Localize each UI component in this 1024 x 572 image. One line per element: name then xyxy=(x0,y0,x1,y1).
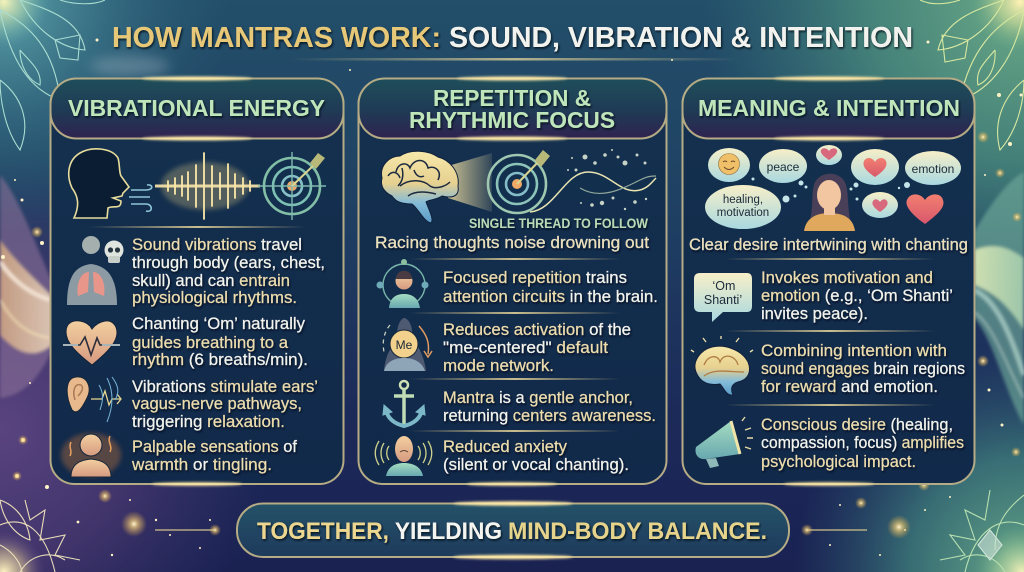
icon: thought clouds: motivation xyxy=(717,207,769,219)
text: mantra anchor: returning centers awareness. xyxy=(443,407,656,425)
left flowing wave xyxy=(0,175,52,398)
text: combining intention: sound engages brain regions xyxy=(761,360,965,378)
icon: thought clouds: peace xyxy=(767,160,800,174)
text: palpable sensations: Palpable sensations of xyxy=(132,438,297,456)
icon: target and arrow xyxy=(488,150,550,213)
icon: om shanti speech bubble xyxy=(694,273,752,322)
text: vibrations stimulate: vagus-nerve pathways, xyxy=(132,395,302,413)
icon: ear and nerve signals xyxy=(67,377,121,422)
title xyxy=(112,22,913,54)
title: SOUND, VIBRATION & INTENTION xyxy=(449,22,913,54)
text: mantra anchor: Mantra is a gentle anchor, xyxy=(443,389,633,407)
text: vibrations stimulate: Vibrations stimulate ears’ xyxy=(132,378,318,396)
glowing sparks xyxy=(12,131,1022,539)
icon: body with lungs and skull xyxy=(67,236,124,305)
text: focused repetition xyxy=(443,269,658,306)
banner: together yielding mind-body balance: TOGETHER, YIELDING xyxy=(257,518,502,545)
text: combining intention: Combining intention with xyxy=(761,342,947,360)
icon: anchor xyxy=(383,381,425,426)
icon: target and arrow xyxy=(258,152,326,220)
text: reduced anxiety: (silent or vocal chanting). xyxy=(443,456,629,474)
text: focused repetition: Focused repetition trains xyxy=(443,269,627,287)
panel: vibrational energy xyxy=(50,76,344,486)
panel header: VIBRATIONAL ENERGY xyxy=(68,95,325,121)
banner: together yielding mind-body balance xyxy=(155,501,867,559)
icon: sound wave xyxy=(155,153,260,219)
text: focused repetition: attention circuits in the brain. xyxy=(443,288,658,306)
icon: speaking head xyxy=(69,149,152,218)
text: vibrations stimulate xyxy=(132,378,318,431)
text: sound vibrations: physiological rhythms. xyxy=(132,289,297,307)
text: invokes motivation: emotion (e.g., ‘Om Shanti’ xyxy=(761,287,953,305)
text: chanting om xyxy=(132,315,308,369)
text: reduces activation: mode network. xyxy=(443,357,554,375)
text: conscious desire: compassion, focus) amplifies xyxy=(761,434,964,452)
banner: together yielding mind-body balance: MIND-BODY BALANCE. xyxy=(508,518,767,545)
icon: megaphone xyxy=(695,417,753,468)
icon: thought clouds: emotion xyxy=(912,162,954,176)
text: conscious desire: Conscious desire (healing, xyxy=(761,416,953,434)
text: sound vibrations xyxy=(132,236,325,307)
text: conscious desire xyxy=(761,416,964,471)
icon: om shanti speech bubble: Shanti’ xyxy=(704,293,742,307)
text: reduces activation xyxy=(443,321,631,375)
text: combining intention: for reward and emotion. xyxy=(761,378,938,396)
text: chanting om: rhythm (6 breaths/min). xyxy=(132,351,308,369)
text: reduces activation: Reduces activation of the xyxy=(443,321,631,339)
panel header: REPETITION & xyxy=(433,85,591,111)
icon: warm person xyxy=(61,433,121,477)
text: sound vibrations: through body (ears, chest, xyxy=(132,254,325,272)
panel header xyxy=(358,76,666,140)
text: sound vibrations: Sound vibrations travel xyxy=(132,236,302,254)
icon: om shanti speech bubble: ‘Om xyxy=(713,279,735,293)
text: reduces activation: "me-centered" default xyxy=(443,339,608,357)
icon: woman with long hair xyxy=(804,174,855,231)
right flowing wave xyxy=(974,172,1024,425)
icon: glowing brain xyxy=(691,336,753,395)
text: palpable sensations: warmth or tingling. xyxy=(131,456,272,474)
text: mantra anchor xyxy=(443,389,656,425)
text: combining intention xyxy=(761,342,965,396)
text: vibrations stimulate: triggering relaxation. xyxy=(132,413,285,431)
icon: thought clouds xyxy=(705,145,961,229)
icon: attention circle person xyxy=(376,259,428,308)
icon: heart with pulse xyxy=(63,321,120,365)
icon: large heart xyxy=(906,194,943,224)
icon: single thread wave and dots xyxy=(530,149,656,212)
text: invokes motivation: Invokes motivation and xyxy=(761,269,933,287)
icon: me-centred head: Me xyxy=(396,338,413,352)
icon: brain with focus beam xyxy=(381,151,492,223)
title: HOW MANTRAS WORK: xyxy=(112,22,441,54)
icon: thought clouds: healing, xyxy=(723,194,763,206)
text: sound vibrations: skull) and can entrain xyxy=(132,272,290,290)
icon: me-centred head xyxy=(383,318,432,371)
text: invokes motivation xyxy=(761,269,953,323)
text: conscious desire: psychological impact. xyxy=(761,453,916,471)
text: chanting om: Chanting ‘Om’ naturally xyxy=(132,315,306,333)
panel header xyxy=(50,76,344,140)
panel: meaning and intention xyxy=(682,76,974,486)
caption: clear desire: Clear desire intertwining with chanting xyxy=(689,236,968,254)
panel: repetition and rhythmic focus xyxy=(358,76,666,486)
panel header xyxy=(682,76,974,140)
panel header: MEANING & INTENTION xyxy=(698,95,960,121)
caption: racing thoughts: Racing thoughts noise drowning out xyxy=(375,234,649,252)
panel header: RHYTHMIC FOCUS xyxy=(409,107,615,133)
icon: calm person with sound waves xyxy=(375,436,432,476)
text: chanting om: guides breathing to a xyxy=(132,334,289,352)
text: invokes motivation: invites peace). xyxy=(761,305,868,323)
label: single thread to follow: SINGLE THREAD TO FOLLOW xyxy=(469,216,648,231)
text: reduced anxiety xyxy=(443,438,629,474)
text: palpable sensations xyxy=(131,438,297,474)
text: reduced anxiety: Reduced anxiety xyxy=(443,438,568,456)
